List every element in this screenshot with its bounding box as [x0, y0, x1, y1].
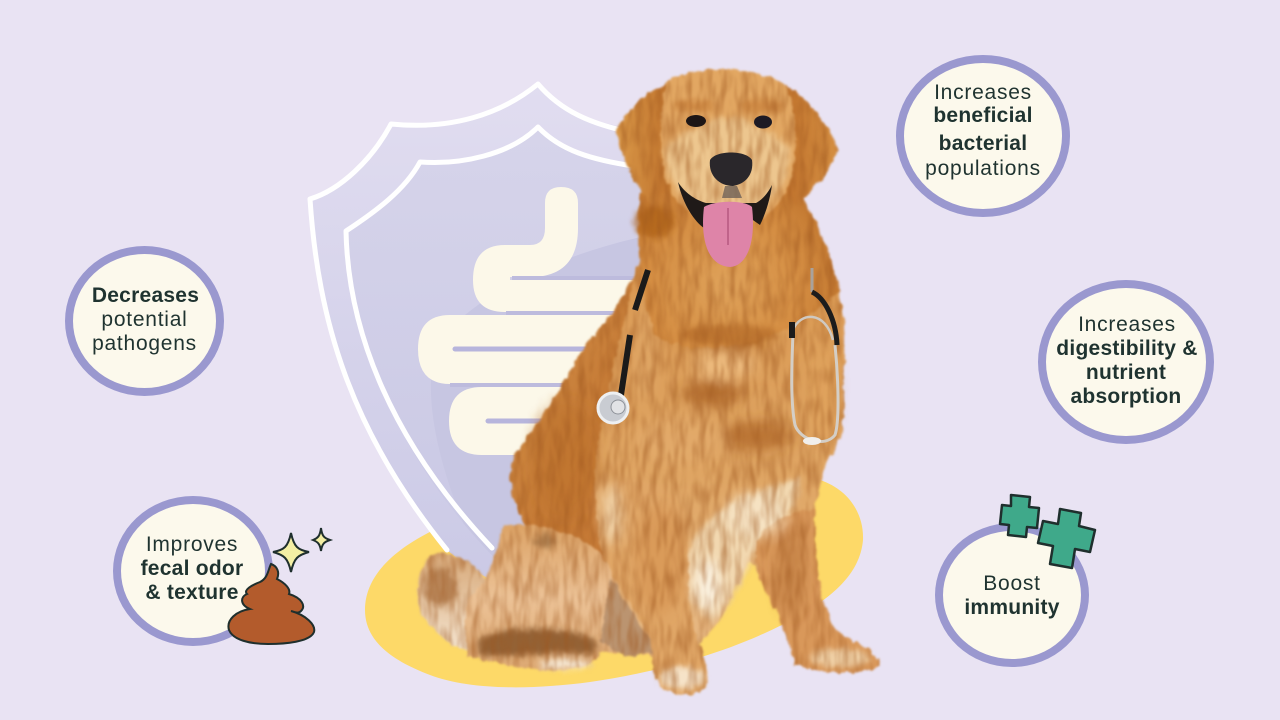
- bubble: boost immunity: [935, 523, 1089, 667]
- tongue: [703, 202, 753, 267]
- bubble: increases digestibility: Increases: [1078, 313, 1176, 336]
- front left leg: [598, 479, 708, 695]
- bubble: improves fecal odor: fecal odor: [141, 557, 243, 580]
- bubble: increases beneficial bacterial populations: populations: [925, 157, 1041, 180]
- yellow ellipse: [365, 480, 863, 687]
- dog fur layers: [418, 69, 880, 695]
- bubble: decreases potential pathogens: [65, 246, 224, 396]
- bubble: decreases potential pathogens: potential: [101, 308, 188, 331]
- fur shadows: [531, 300, 836, 615]
- bubble: decreases potential pathogens: Decreases: [92, 284, 199, 307]
- intestine icon: [418, 187, 660, 455]
- dog: [418, 69, 880, 695]
- bubble: increases digestibility: nutrient: [1086, 361, 1166, 384]
- muzzle: [664, 118, 790, 212]
- ear right: [778, 82, 838, 205]
- brows: [672, 100, 716, 112]
- haunch markings: [423, 534, 870, 689]
- bubble: increases digestibility: digestibility &: [1056, 337, 1198, 360]
- illustration: shield, intestine and dog: [308, 67, 882, 698]
- mouth: [678, 182, 772, 228]
- bubble: increases beneficial bacterial populations: Increases: [934, 81, 1032, 104]
- chest cream: [684, 478, 800, 623]
- bubble: improves fecal odor: [113, 496, 273, 646]
- front right leg: [756, 510, 880, 673]
- shield: [308, 82, 642, 578]
- bubble: boost immunity: Boost: [983, 572, 1041, 595]
- icon: green crosses: [1000, 495, 1095, 568]
- haunch: [465, 525, 655, 670]
- belly shadow: [600, 580, 665, 657]
- head base: [661, 69, 796, 226]
- tail: [418, 553, 530, 655]
- stethoscope: [598, 268, 838, 445]
- icon: poop: [228, 564, 314, 644]
- bubble: increases beneficial bacterial populations: bacterial: [939, 132, 1027, 155]
- bubble: boost immunity: immunity: [964, 596, 1060, 619]
- bubble: increases beneficial bacterial populations: beneficial: [933, 104, 1033, 127]
- bubble: improves fecal odor: & texture: [145, 581, 239, 604]
- back: [511, 255, 680, 563]
- icon: sparkles: [273, 528, 330, 572]
- ruff: [639, 185, 840, 348]
- nose: [710, 152, 752, 186]
- bubble: increases digestibility: absorption: [1070, 385, 1182, 408]
- bubble: increases beneficial bacterial populations: [896, 55, 1070, 217]
- eyes: [686, 115, 772, 128]
- bubble: increases digestibility: [1038, 280, 1214, 444]
- torso: [595, 215, 845, 650]
- ear left: [616, 82, 675, 205]
- bubble: improves fecal odor: Improves: [146, 533, 238, 556]
- bubble: decreases potential pathogens: pathogens: [92, 332, 197, 355]
